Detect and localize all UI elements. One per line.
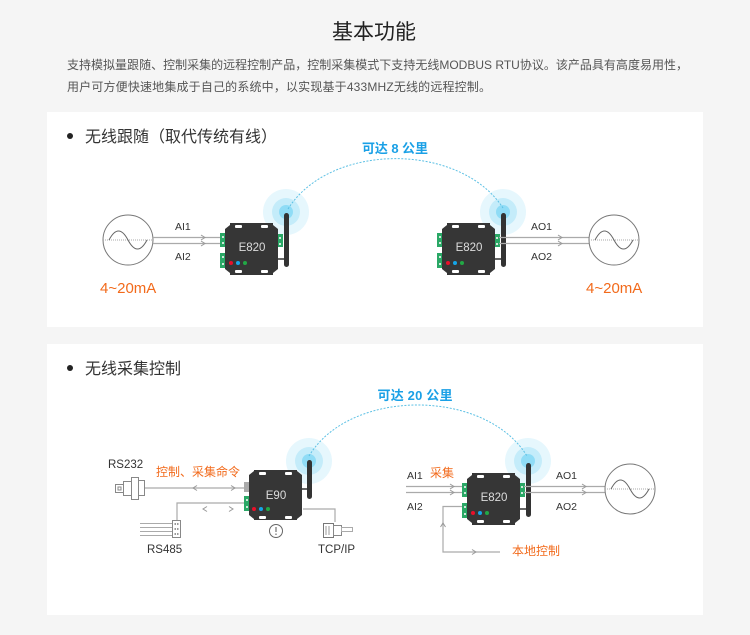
right signal output bbox=[589, 215, 639, 265]
left wires AI1 AI2 bbox=[406, 470, 463, 513]
right wires AO1 AO2 bbox=[499, 221, 590, 263]
heading: wireless acquisition control: 无线采集控制 bbox=[85, 360, 181, 378]
left signal source bbox=[103, 215, 153, 265]
RS485 connector bbox=[140, 503, 244, 556]
device: E820 left bbox=[220, 189, 309, 275]
label: local control: 本地控制 bbox=[512, 544, 560, 558]
dashed radio arc bbox=[309, 405, 527, 456]
local control line bbox=[440, 506, 500, 554]
RS232 connector bbox=[108, 459, 245, 500]
device: E820 left: E820 bbox=[239, 242, 265, 254]
TCP/IP connector bbox=[303, 509, 355, 556]
label: acquisition: 采集 bbox=[430, 465, 454, 480]
panel: wireless follow bbox=[47, 112, 703, 327]
device: E820 receiver: E820 bbox=[481, 492, 507, 504]
TCP/IP connector: TCP/IP bbox=[318, 544, 355, 556]
left wires AI1 AI2: AI2 bbox=[407, 501, 423, 513]
device: E820 right bbox=[437, 189, 526, 275]
range label: 8 km: 可达 8 公里 bbox=[362, 141, 428, 156]
right signal output bbox=[605, 464, 655, 514]
dashed radio arc bbox=[288, 159, 503, 209]
RS232 connector: RS232 bbox=[108, 459, 143, 471]
intro paragraph bbox=[67, 57, 688, 94]
device: E90 bbox=[244, 438, 332, 520]
right wires AO1 AO2: AO2 bbox=[556, 501, 577, 513]
range label: 20 km: 可达 20 公里 bbox=[378, 388, 452, 403]
right 4-20mA label: 4~20mA bbox=[586, 280, 642, 297]
title: 基本功能 bbox=[332, 21, 416, 44]
intro paragraph: 用户可方便快速地集成于自己的系统中，以实现基于433MHZ无线的远程控制。 bbox=[67, 79, 491, 94]
device: E820 right: E820 bbox=[456, 242, 482, 254]
device: E90: E90 bbox=[266, 490, 286, 502]
left wires AI1 AI2: AI1 bbox=[175, 221, 191, 233]
heading: wireless follow: 无线跟随（取代传统有线） bbox=[85, 128, 277, 146]
left wires AI1 AI2 bbox=[153, 221, 221, 263]
RS485 connector: RS485 bbox=[147, 544, 182, 556]
device: E820 receiver bbox=[462, 438, 551, 525]
panel: wireless acquisition control bbox=[47, 344, 703, 615]
left wires AI1 AI2: AI2 bbox=[175, 251, 191, 263]
icon: info circle bbox=[270, 524, 282, 538]
label: control and acquisition command: 控制、采集命令 bbox=[156, 464, 240, 479]
left 4-20mA label: 4~20mA bbox=[100, 280, 156, 297]
right wires AO1 AO2 bbox=[524, 470, 606, 513]
right wires AO1 AO2: AO1 bbox=[556, 470, 577, 482]
right wires AO1 AO2: AO2 bbox=[531, 251, 552, 263]
intro paragraph: 支持模拟量跟随、控制采集的远程控制产品，控制采集模式下支持无线MODBUS RTU协议。该产品具有高度易用性， bbox=[67, 57, 688, 72]
left wires AI1 AI2: AI1 bbox=[407, 470, 423, 482]
right wires AO1 AO2: AO1 bbox=[531, 221, 552, 233]
